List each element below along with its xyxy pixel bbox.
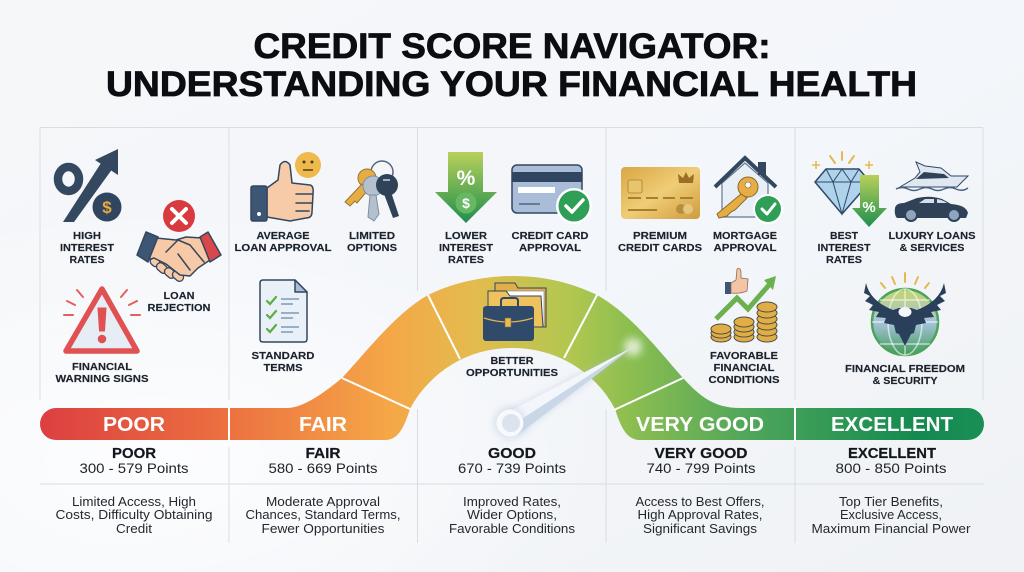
label: standard terms: TERMS xyxy=(264,362,302,374)
tier: poor: Costs, Difficulty Obtaining xyxy=(56,508,213,522)
tier: fair xyxy=(246,446,400,536)
title: UNDERSTANDING YOUR FINANCIAL HEALTH xyxy=(106,65,917,104)
label: limited options: LIMITED xyxy=(349,230,395,242)
tier: poor: POOR xyxy=(112,446,157,462)
label: loan rejection xyxy=(148,290,210,314)
label: standard terms xyxy=(252,350,315,374)
label: financial warning signs: WARNING SIGNS xyxy=(56,373,148,385)
label: favorable financial conditions: CONDITIONS xyxy=(708,374,780,386)
icon: high interest percent arrow xyxy=(58,149,122,222)
icon: lower interest arrow: % xyxy=(457,167,476,190)
label: financial warning signs: FINANCIAL xyxy=(72,361,133,373)
label: high interest rates: INTEREST xyxy=(60,242,115,254)
label: mortgage approval xyxy=(713,230,777,254)
panel: good icons xyxy=(435,152,592,379)
label: lower interest rates: RATES xyxy=(448,254,484,266)
icon: high interest percent arrow: $ xyxy=(102,198,112,217)
icon: briefcase and folders xyxy=(483,283,546,341)
tier: excellent: Top Tier Benefits, xyxy=(839,495,943,509)
label: standard terms: STANDARD xyxy=(252,350,315,362)
label: luxury loans and services xyxy=(888,230,976,254)
tier: very good xyxy=(636,446,764,536)
label: lower interest rates xyxy=(439,230,494,266)
tier: poor: 300 - 579 Points xyxy=(80,460,188,476)
label: loan rejection: REJECTION xyxy=(148,302,210,314)
title: CREDIT SCORE NAVIGATOR: xyxy=(254,27,770,66)
label: best interest rates: INTEREST xyxy=(818,242,871,254)
tier: excellent: EXCELLENT xyxy=(848,446,936,462)
label: premium credit cards: CREDIT CARDS xyxy=(618,242,702,254)
icon: thumbs up with neutral face xyxy=(251,152,321,221)
icon: standard terms document xyxy=(260,280,307,342)
label: average loan approval xyxy=(234,230,332,254)
label: financial freedom and security xyxy=(845,363,965,387)
label: credit card approval: APPROVAL xyxy=(519,242,582,254)
tier: fair: Fewer Opportunities xyxy=(262,522,384,536)
label: favorable financial conditions: FAVORABLE xyxy=(710,350,778,362)
label: lower interest rates: LOWER xyxy=(445,230,487,242)
title xyxy=(106,27,917,104)
tier: good: 670 - 739 Points xyxy=(458,460,566,476)
gauge needle xyxy=(494,338,642,439)
icon: credit card approval xyxy=(512,165,592,224)
icon: eagle and globe xyxy=(864,273,946,355)
label: favorable financial conditions: FINANCIAL xyxy=(714,362,775,374)
label: lower interest rates: INTEREST xyxy=(439,242,494,254)
band label: very good: VERY GOOD xyxy=(636,414,764,436)
tier: excellent: 800 - 850 Points xyxy=(836,460,946,476)
label: mortgage approval: MORTGAGE xyxy=(713,230,777,242)
label: average loan approval: AVERAGE xyxy=(256,230,310,242)
label: mortgage approval: APPROVAL xyxy=(714,242,777,254)
label: premium credit cards: PREMIUM xyxy=(633,230,687,242)
tier: fair: 580 - 669 Points xyxy=(268,460,378,476)
label: premium credit cards xyxy=(618,230,702,254)
icon: diamond with down arrow: % xyxy=(862,199,876,216)
label: best interest rates: BEST xyxy=(830,230,859,242)
tier: excellent: Exclusive Access, xyxy=(840,508,942,522)
label: high interest rates xyxy=(60,230,115,266)
panel: very good icons xyxy=(618,158,783,386)
label: luxury loans and services: & SERVICES xyxy=(900,242,964,254)
label: limited options xyxy=(347,230,397,254)
tier: good: Wider Options, xyxy=(467,508,557,522)
label: credit card approval: CREDIT CARD xyxy=(512,230,589,242)
icon: favorable conditions coins and growth arrow xyxy=(711,268,777,342)
tier: poor: Credit xyxy=(116,522,153,536)
tier: good: GOOD xyxy=(488,446,536,462)
icon: lower interest arrow: $ xyxy=(462,195,470,211)
tier: very good: High Approval Rates, xyxy=(638,508,762,522)
tier: fair: Chances, Standard Terms, xyxy=(246,508,400,522)
icon: keys xyxy=(345,161,399,221)
tier: poor: Limited Access, High xyxy=(72,495,196,509)
tier: good xyxy=(449,446,575,536)
label: average loan approval: LOAN APPROVAL xyxy=(234,242,332,254)
icon: yacht and car xyxy=(895,162,968,221)
band label: fair: FAIR xyxy=(299,414,348,436)
icon: diamond with down arrow xyxy=(812,152,887,227)
icon: mortgage approval house and key xyxy=(715,158,783,224)
panel: poor icons xyxy=(56,149,221,385)
label: better opportunities: BETTER xyxy=(490,355,534,367)
label: better opportunities xyxy=(466,355,558,379)
label: high interest rates: HIGH xyxy=(73,230,101,242)
band label: excellent: EXCELLENT xyxy=(831,414,953,436)
icon: loan rejection handshake xyxy=(137,200,221,283)
tier: very good: Significant Savings xyxy=(643,522,757,536)
label: best interest rates: RATES xyxy=(826,254,862,266)
tier: poor xyxy=(56,446,213,536)
tier: very good: Access to Best Offers, xyxy=(636,495,764,509)
label: best interest rates xyxy=(818,230,871,266)
label: financial warning signs xyxy=(56,361,148,385)
icon: financial warning triangle xyxy=(64,289,140,351)
label: loan rejection: LOAN xyxy=(164,290,194,302)
label: limited options: OPTIONS xyxy=(347,242,397,254)
band label: poor: POOR xyxy=(103,414,166,436)
label: high interest rates: RATES xyxy=(70,254,104,266)
tier: excellent xyxy=(812,446,970,536)
label: favorable financial conditions xyxy=(708,350,780,386)
tier: good: Favorable Conditions xyxy=(449,522,575,536)
icon: premium gold credit card xyxy=(621,167,700,219)
tier: very good: VERY GOOD xyxy=(654,446,748,462)
tier: good: Improved Rates, xyxy=(463,495,561,509)
tier: fair: Moderate Approval xyxy=(266,495,380,509)
tier: very good: 740 - 799 Points xyxy=(646,460,756,476)
label: luxury loans and services: LUXURY LOANS xyxy=(888,230,976,242)
tier: fair: FAIR xyxy=(306,446,341,462)
label: better opportunities: OPPORTUNITIES xyxy=(466,367,558,379)
label: financial freedom and security: FINANCIAL FREEDOM xyxy=(845,363,965,375)
gauge band and arc xyxy=(40,276,984,441)
tier: excellent: Maximum Financial Power xyxy=(812,522,970,536)
label: credit card approval xyxy=(512,230,589,254)
panel: excellent icons xyxy=(812,152,976,387)
label: financial freedom and security: & SECURITY xyxy=(872,375,938,387)
icon: lower interest arrow xyxy=(435,152,497,223)
panel: fair icons xyxy=(234,152,399,374)
